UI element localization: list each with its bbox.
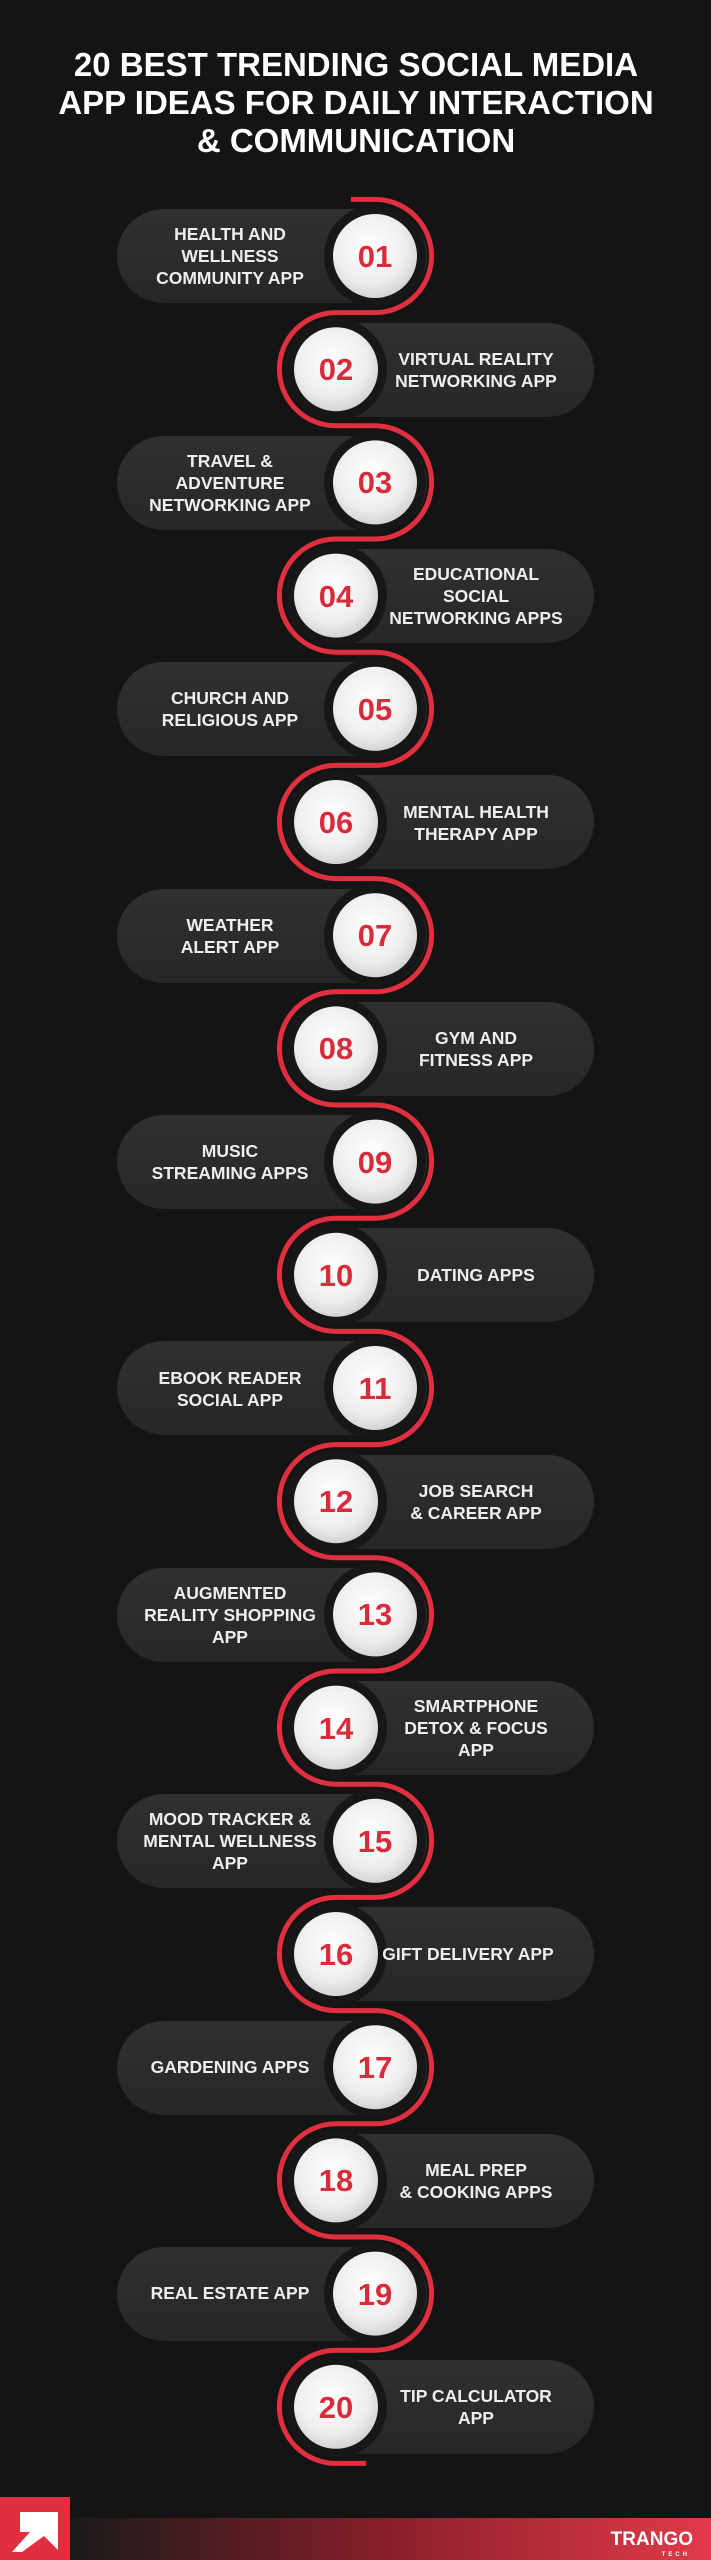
brand text: TRANGO xyxy=(611,2529,693,2550)
item labels: SOCIAL APP xyxy=(177,1390,283,1410)
item labels: ADVENTURE xyxy=(176,473,284,493)
footer bar xyxy=(70,2518,711,2560)
item labels: WELLNESS xyxy=(181,246,279,266)
item labels: FITNESS APP xyxy=(419,1050,533,1070)
item labels: MOOD TRACKER & xyxy=(149,1809,312,1829)
item labels: NETWORKING APP xyxy=(395,371,557,391)
item labels: AUGMENTED xyxy=(174,1583,286,1603)
numbers xyxy=(319,239,392,2425)
item labels: MUSIC xyxy=(202,1141,259,1161)
item labels: CHURCH AND xyxy=(171,688,289,708)
item labels: MENTAL WELLNESS xyxy=(143,1831,317,1851)
item labels: TRAVEL & xyxy=(187,451,273,471)
numbers: 11 xyxy=(359,1371,391,1406)
numbers: 08 xyxy=(319,1031,353,1066)
numbers: 20 xyxy=(319,2390,353,2425)
item labels: MEAL PREP xyxy=(425,2160,527,2180)
item labels: VIRTUAL REALITY xyxy=(398,349,554,369)
numbers: 07 xyxy=(358,918,392,953)
title: 20 BEST TRENDING SOCIAL MEDIA xyxy=(74,46,638,83)
numbers: 04 xyxy=(319,579,354,614)
title: & COMMUNICATION xyxy=(197,122,515,159)
item labels: RELIGIOUS APP xyxy=(162,710,299,730)
numbers: 19 xyxy=(358,2277,392,2312)
logo square xyxy=(0,2497,70,2560)
item labels: HEALTH AND xyxy=(174,224,286,244)
number circles xyxy=(294,214,417,2449)
item labels: TIP CALCULATOR xyxy=(400,2386,552,2406)
item labels: APP xyxy=(212,1853,248,1873)
item labels: APP xyxy=(212,1627,248,1647)
item labels xyxy=(143,224,563,2428)
numbers: 16 xyxy=(319,1937,353,1972)
numbers: 17 xyxy=(358,2050,392,2085)
item labels: & CAREER APP xyxy=(410,1503,542,1523)
item labels: THERAPY APP xyxy=(414,824,538,844)
brand text: TECH xyxy=(662,2552,690,2558)
numbers: 14 xyxy=(319,1711,354,1746)
numbers: 06 xyxy=(319,805,353,840)
red connector curve xyxy=(279,199,432,2463)
numbers: 10 xyxy=(319,1258,353,1293)
pills xyxy=(117,209,594,2454)
title: APP IDEAS FOR DAILY INTERACTION xyxy=(58,84,654,121)
item labels: APP xyxy=(458,2408,494,2428)
item labels: EDUCATIONAL xyxy=(413,564,539,584)
numbers: 15 xyxy=(358,1824,392,1859)
item labels: COMMUNITY APP xyxy=(156,268,304,288)
item labels: REAL ESTATE APP xyxy=(151,2283,310,2303)
item labels: GARDENING APPS xyxy=(151,2057,309,2077)
item labels: MENTAL HEALTH xyxy=(403,802,549,822)
item labels: NETWORKING APP xyxy=(149,495,311,515)
item labels: NETWORKING APPS xyxy=(389,608,563,628)
numbers: 03 xyxy=(358,465,392,500)
title xyxy=(58,46,654,159)
numbers: 12 xyxy=(319,1484,353,1519)
item labels: & COOKING APPS xyxy=(400,2182,552,2202)
item labels: DETOX & FOCUS xyxy=(404,1718,548,1738)
item labels: APP xyxy=(458,1740,494,1760)
numbers: 05 xyxy=(358,692,392,727)
item labels: STREAMING APPS xyxy=(152,1163,308,1183)
item labels: REALITY SHOPPING xyxy=(144,1605,316,1625)
numbers: 13 xyxy=(358,1597,392,1632)
item labels: GIFT DELIVERY APP xyxy=(382,1944,554,1964)
dark rings xyxy=(285,205,426,2458)
item labels: ALERT APP xyxy=(181,937,280,957)
item labels: JOB SEARCH xyxy=(419,1481,533,1501)
item labels: WEATHER xyxy=(186,915,274,935)
numbers: 02 xyxy=(319,352,353,387)
numbers: 09 xyxy=(358,1145,392,1180)
numbers: 01 xyxy=(358,239,392,274)
numbers: 18 xyxy=(319,2163,353,2198)
item labels: DATING APPS xyxy=(417,1265,535,1285)
item labels: SOCIAL xyxy=(443,586,509,606)
item labels: EBOOK READER xyxy=(159,1368,302,1388)
item labels: SMARTPHONE xyxy=(414,1696,538,1716)
item labels: GYM AND xyxy=(435,1028,517,1048)
